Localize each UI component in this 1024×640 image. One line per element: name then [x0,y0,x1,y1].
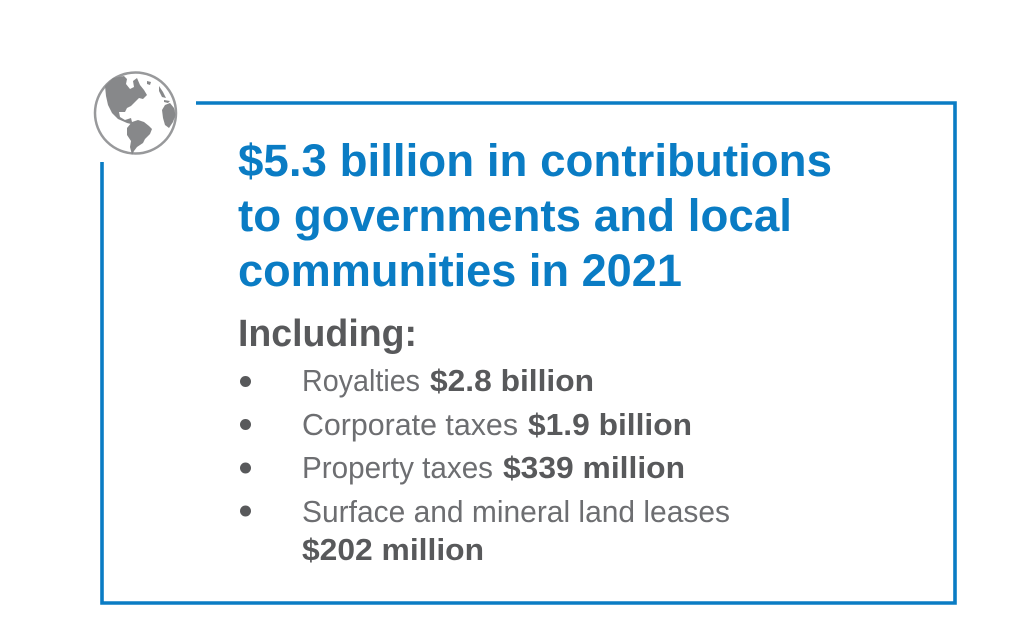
list item: land leases [240,494,730,567]
list item: corporate taxes: $1.9 billion [528,407,692,442]
list item: royalties: Royalties [302,363,420,398]
list item: property taxes: $339 million [503,450,685,485]
title: $5.3 billion in contributions [238,135,832,186]
panel frame [102,103,955,603]
title: communities in 2021 [238,245,682,296]
list item: property taxes: Property taxes [302,450,493,485]
subheading: Including: [238,313,417,355]
list item: land leases: Surface and mineral land leases [302,494,730,529]
list item: royalties [240,363,594,398]
list item: land leases: $202 million [302,532,484,567]
title [238,135,832,296]
list item: royalties: $2.8 billion [430,363,594,398]
list item: property taxes [240,450,685,485]
title: to governments and local [238,190,792,241]
list: contributions breakdown [240,363,730,567]
list item: corporate taxes [240,407,692,442]
icon: globe [95,72,176,155]
list item: corporate taxes: Corporate taxes [302,407,518,442]
